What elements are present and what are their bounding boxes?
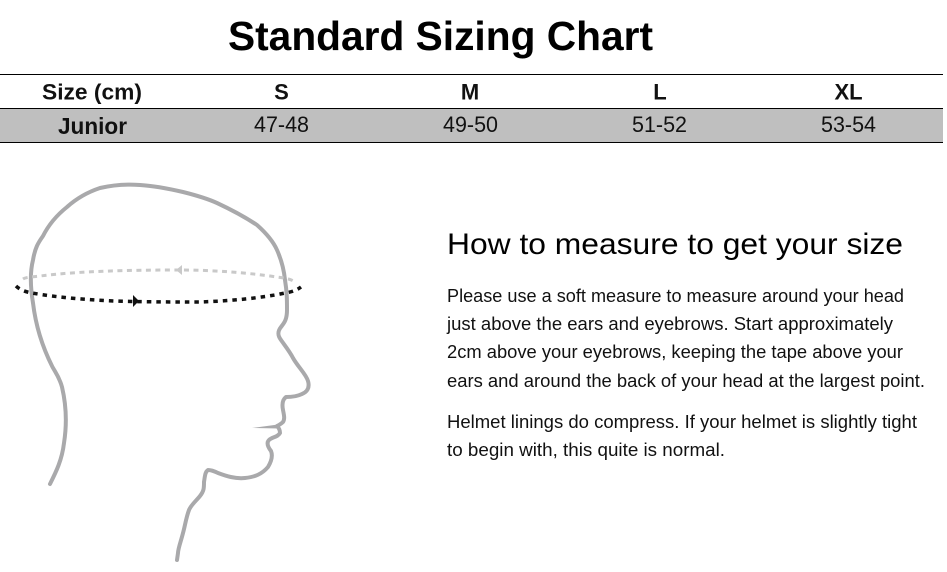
junior row: 49-50	[443, 112, 498, 137]
junior row: 53-54	[821, 112, 876, 137]
head outline	[31, 185, 309, 560]
mouth line	[252, 424, 279, 428]
front tape arrow	[133, 295, 139, 307]
header row: XL	[834, 80, 863, 104]
measuring instructions: 2cm above your eyebrows, keeping the tape above your	[447, 342, 903, 362]
junior row: 51-52	[632, 112, 687, 137]
back tape arrow	[176, 265, 182, 275]
sizing table	[0, 74, 943, 142]
title: Standard Sizing Chart	[228, 13, 653, 59]
head profile diagram	[16, 185, 309, 560]
junior row: Junior	[58, 113, 127, 139]
measuring instructions: Please use a soft measure to measure around your head	[447, 286, 904, 306]
header row: M	[461, 80, 479, 104]
back tape measure line	[23, 270, 295, 282]
header row: S	[274, 80, 289, 104]
junior row: 47-48	[254, 112, 309, 137]
helmet lining note	[447, 412, 917, 460]
helmet lining note: to begin with, this quite is normal.	[447, 440, 725, 460]
measuring instructions: just above the ears and eyebrows. Start approximately	[446, 314, 893, 334]
helmet lining note: Helmet linings do compress. If your helmet is slightly tight	[447, 412, 917, 432]
header row: Size (cm)	[42, 80, 142, 104]
junior row background	[0, 108, 943, 142]
header row: L	[653, 80, 667, 104]
junior row	[58, 112, 876, 139]
instructions heading: How to measure to get your size	[447, 228, 903, 261]
front tape measure line	[16, 286, 301, 302]
measuring instructions: ears and around the back of your head at the largest point.	[447, 371, 925, 391]
header row	[42, 80, 863, 104]
measuring instructions	[446, 286, 925, 391]
